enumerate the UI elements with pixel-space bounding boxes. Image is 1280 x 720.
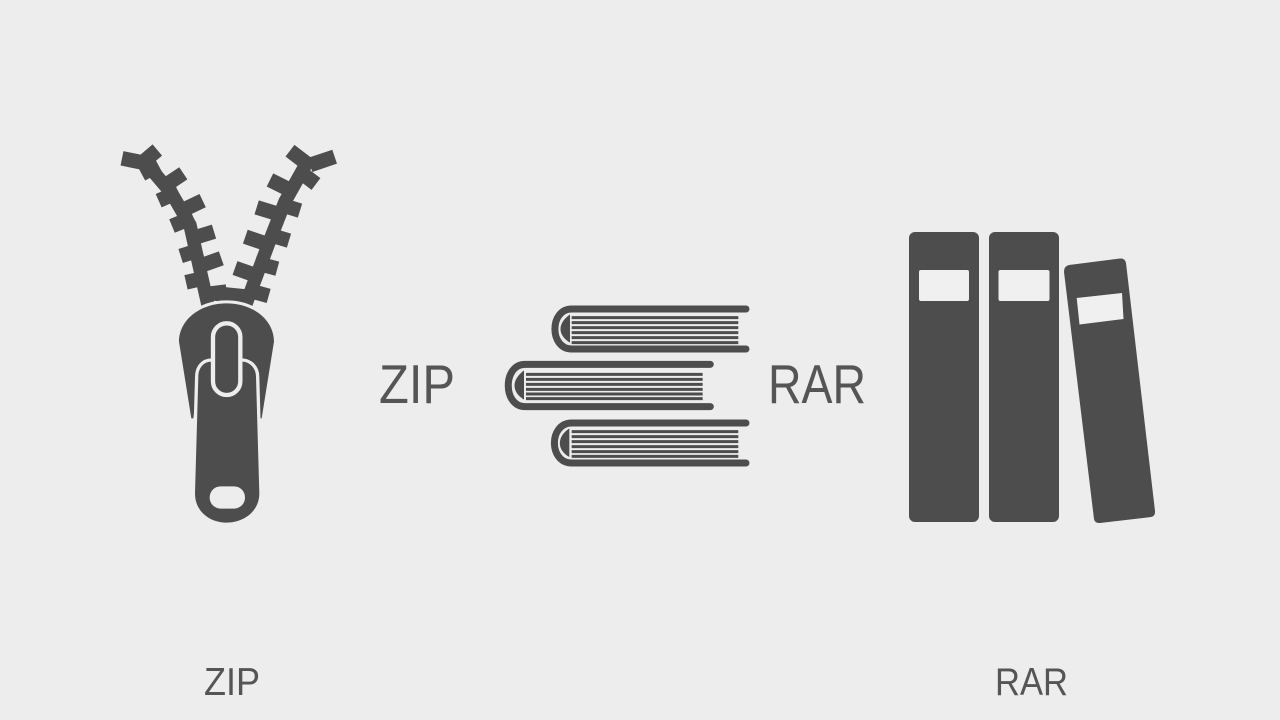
book top — [555, 309, 746, 349]
label: ZIP center: ZIP — [379, 353, 455, 415]
icon: three binders — [909, 232, 1155, 523]
binder 1 — [909, 232, 979, 522]
zipper right strand — [213, 151, 335, 307]
book middle — [508, 364, 710, 407]
binder 3 tilted — [1064, 258, 1155, 523]
book bottom — [554, 423, 746, 463]
zipper left strand — [122, 150, 227, 307]
binder 2 — [989, 232, 1059, 522]
caption: ZIP: ZIP — [204, 661, 260, 704]
label: RAR center: RAR — [768, 353, 866, 415]
icon: stack of three books — [508, 309, 746, 463]
icon: open zipper — [122, 150, 335, 523]
caption: RAR: RAR — [995, 661, 1068, 704]
zipper slider and pull — [179, 303, 274, 523]
